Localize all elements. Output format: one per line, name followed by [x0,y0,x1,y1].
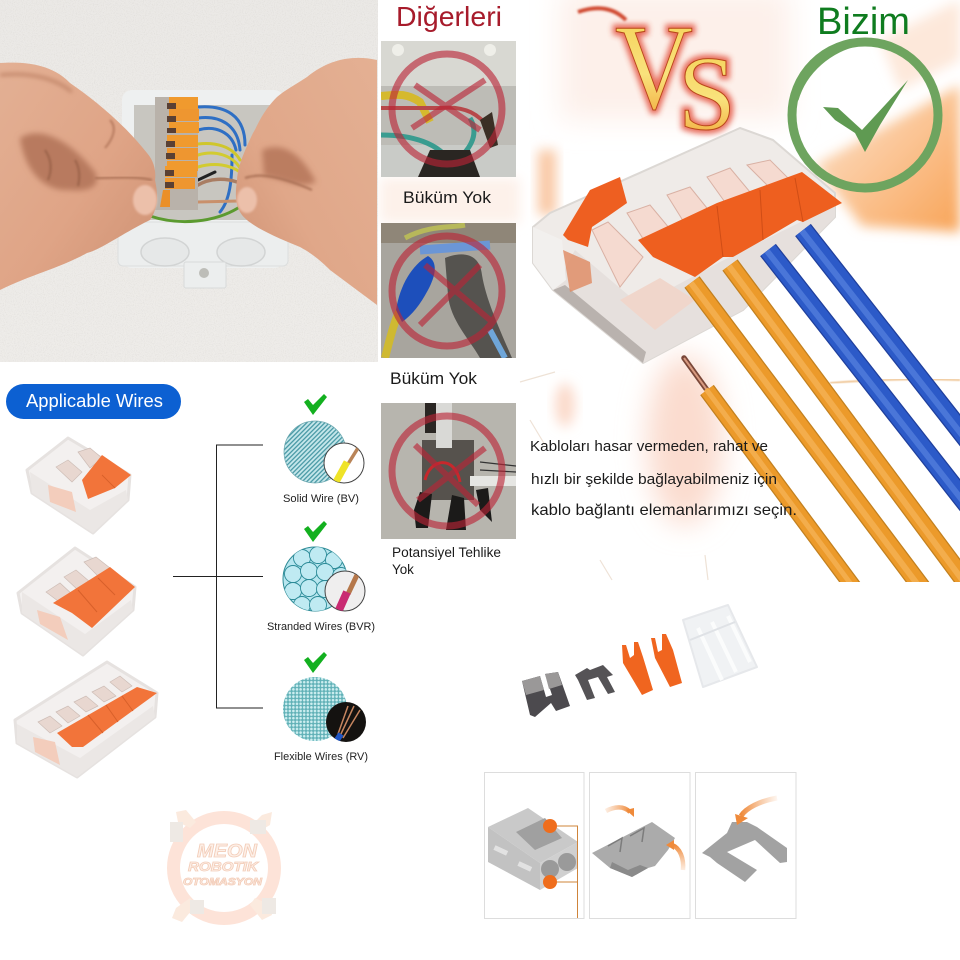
main connector body [533,128,835,363]
cable: blue 1 [767,250,960,528]
connector: 5 port [15,662,157,777]
description text: hızlı bir şekilde bağlayabilmeniz için [531,471,777,488]
cable: orange 1 [691,282,928,597]
panel: product background splash [380,0,960,580]
watermark logo: MEON [197,841,258,861]
watermark logo: OTOMASYON [183,877,263,888]
photo: bad wiring 1 [381,41,516,177]
VS fire lettering [578,0,736,152]
frame: metal spring [590,772,690,918]
prohibition sign [392,236,502,346]
caption: potential danger [392,545,501,577]
lever windows [592,160,790,287]
cable: orange 2 [729,265,960,597]
tree connector lines [173,445,263,708]
icon: green check in brush circle [792,42,938,188]
photo: bad wiring 2 [381,223,516,358]
arrow: bend side [666,840,683,870]
part: clear cap [683,605,757,687]
description text: Kabloları hasar vermeden, rahat ve [530,438,768,455]
icon: check [304,521,327,542]
caption: no twisting 1: Büküm Yok [403,188,492,207]
VS fire lettering: V [615,0,693,135]
part: dark clamp [522,672,570,717]
cable: blue 2 [802,230,960,463]
wire type: solid [283,394,364,505]
wires in box [150,107,245,222]
left hand [0,63,157,290]
wires: colored cables [684,230,960,597]
caption: potential danger: Potansiyel Tehlike [392,545,501,560]
wire type: stranded: Stranded Wires (BVR) [267,621,375,633]
description text [530,438,797,519]
closed levers [638,172,842,277]
watermark logo: ROBOTIK [188,859,260,874]
wire type: stranded [267,521,375,633]
photo: bad wiring 3 [381,403,516,539]
prohibition sign [392,416,502,526]
badge: applicable wires: Applicable Wires [26,391,163,411]
caption: no twisting 2: Büküm Yok [390,369,478,388]
right hand [236,58,377,305]
junction box [118,90,288,288]
cable: thin orange with copper tip [684,358,860,596]
arrow: pointing to contact [735,798,777,825]
orange levers [563,172,842,277]
wire type: solid: Solid Wire (BV) [283,493,359,505]
caption: potential danger: Yok [392,562,414,577]
watermark logo [170,810,276,922]
VS fire lettering: S [678,35,736,152]
connector: 2 port [27,438,131,533]
icon: check [304,652,327,673]
heading: others: Diğerleri [396,1,502,32]
VS fire lettering: V [615,0,693,135]
VS fire lettering: S [678,35,736,152]
icon: check [304,394,327,415]
raised lever [563,177,627,247]
orange connector stack [155,97,199,210]
frame: gray housing [484,772,584,918]
frame: H contact [696,772,796,918]
wire type: flexible [274,652,368,763]
panel: installation photo [0,0,378,362]
exploded connector parts [522,605,757,717]
prohibition sign [392,54,502,164]
wire type: flexible: Flexible Wires (RV) [274,751,368,763]
arrow: bend top [606,807,634,817]
connector: 3 port [18,548,135,655]
description text: kablo bağlantı elemanlarımızı seçin. [531,502,797,519]
part: orange levers [622,634,682,695]
heading: ours: Bizim [817,1,910,43]
part: dark bar [575,665,615,700]
badge: applicable wires [6,384,181,419]
